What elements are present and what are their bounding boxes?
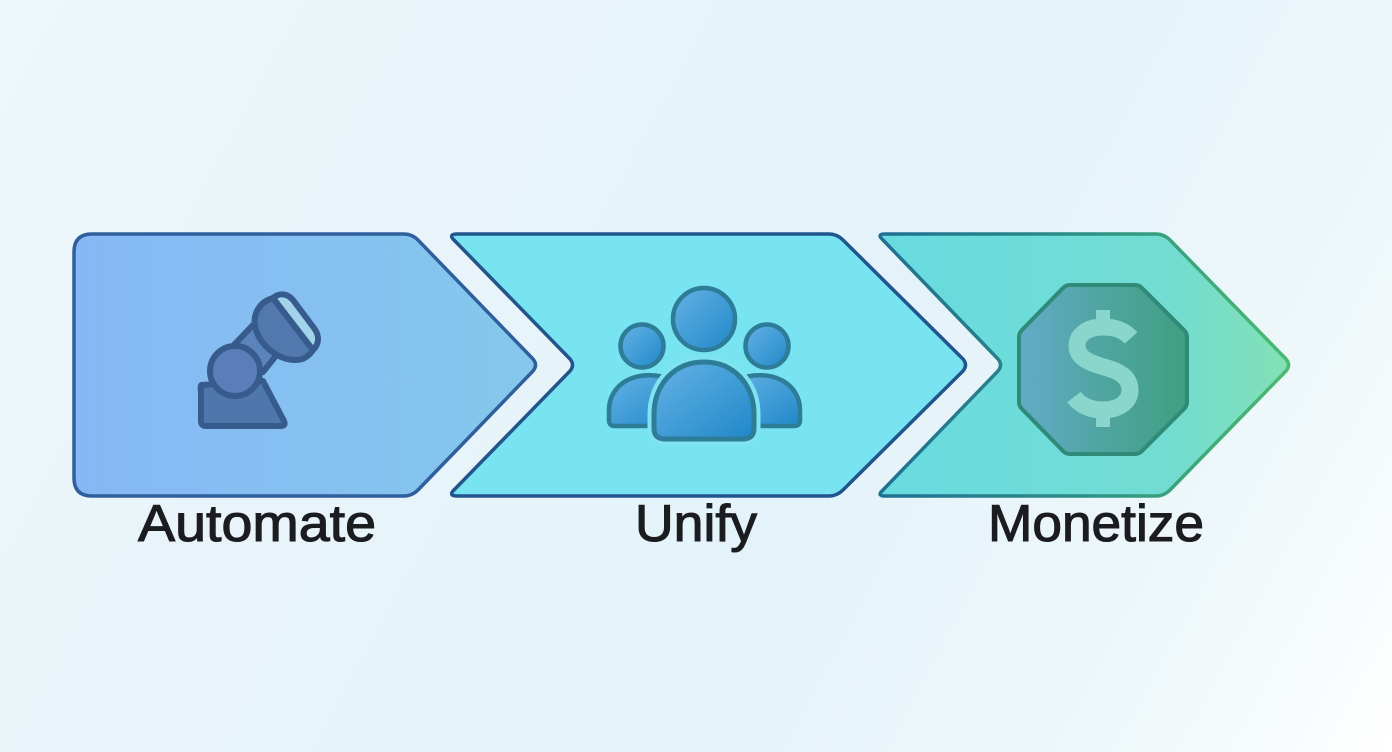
- icon: robotic arm: [201, 294, 318, 426]
- panel: Unify arrow: [452, 234, 966, 496]
- icon: group of people: [609, 288, 800, 439]
- label: Unify: Unify: [635, 495, 757, 553]
- panel: Monetize arrow: [880, 234, 1288, 496]
- dollar sign: [1074, 310, 1131, 427]
- label: Monetize: Monetize: [988, 495, 1204, 553]
- panel: Automate arrow: [74, 234, 536, 496]
- label: Automate: Automate: [138, 495, 376, 553]
- icon: dollar octagon: [1019, 285, 1187, 454]
